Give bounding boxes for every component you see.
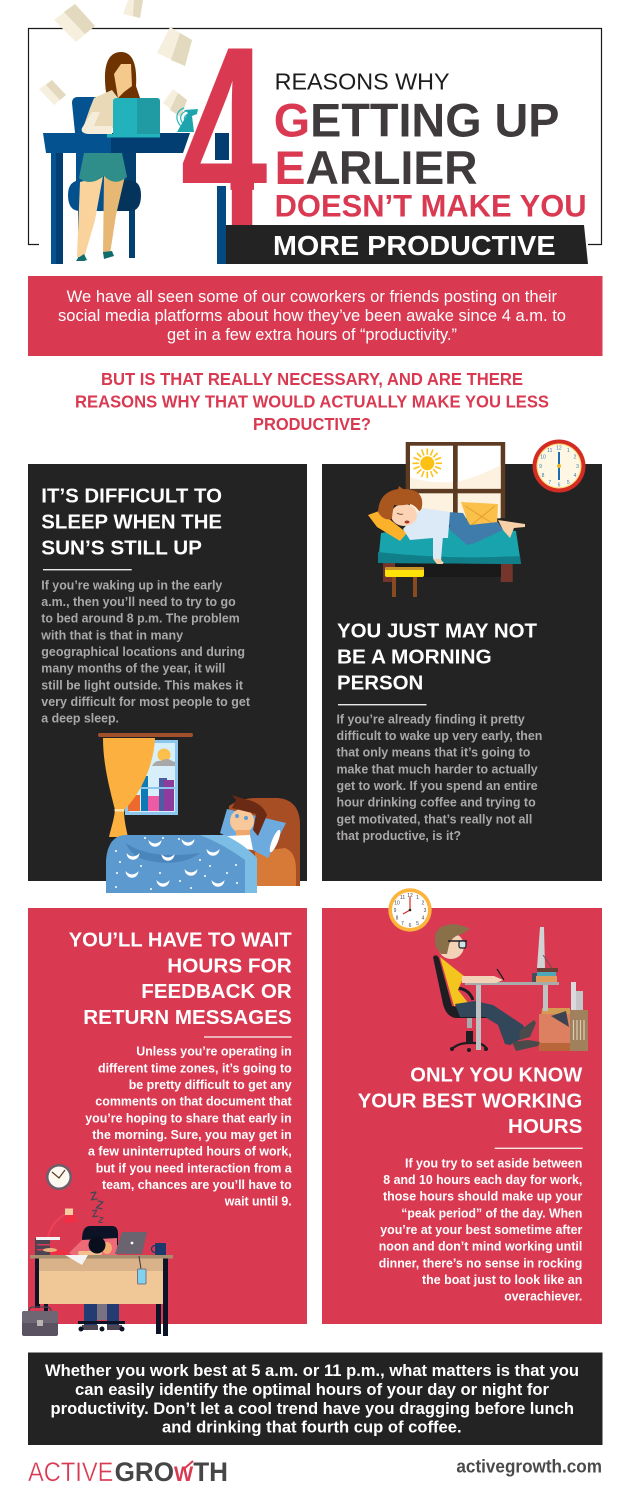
icon: wall clock: 11 <box>547 448 553 454</box>
reason 2 text: that productive, is it? <box>336 828 461 843</box>
reason 1 text: many months of the year, it will <box>41 661 225 676</box>
laptop <box>113 98 137 137</box>
snoring Z letters: Z <box>95 1197 105 1213</box>
reason 3 heading: FEEDBACK OR <box>141 980 292 1003</box>
icon: wall clock: 3 <box>576 464 579 470</box>
arm <box>462 976 503 983</box>
icon: wall clock: 3 <box>424 908 427 914</box>
question heading: PRODUCTIVE? <box>253 414 371 434</box>
reason 3 text: wait until 9. <box>224 1194 292 1209</box>
panel: conclusion: can easily identify the optimal hours of your day or night for <box>75 1381 550 1399</box>
reason 1 text: geographical locations and during <box>41 644 245 659</box>
icon: clock <box>46 1164 72 1190</box>
title: REASONS WHY <box>275 68 450 94</box>
reason 3 text: a few uninterrupted hours of work, <box>88 1144 292 1159</box>
reason 1 text: a.m., then you’ll need to try to go <box>41 594 236 609</box>
trousers and shoes <box>455 1001 540 1051</box>
reason 3 text: but if you need interaction from a <box>96 1160 293 1175</box>
header frame <box>28 28 602 244</box>
panel: conclusion: Whether you work best at 5 a.m. or 11 p.m., what matters is that you <box>45 1362 579 1380</box>
reason 1 heading: IT’S DIFFICULT TO <box>41 485 222 508</box>
reason 3 heading: HOURS FOR <box>167 954 292 977</box>
icon: wall clock: 6 <box>558 482 561 488</box>
reason 4 text: If you try to set aside between <box>405 1155 582 1170</box>
reason 2 text: If you’re already finding it pretty <box>336 711 526 726</box>
snoring Z letters: Z <box>98 1214 104 1225</box>
icon: wall clock <box>388 888 432 932</box>
chair back <box>82 1226 118 1245</box>
big number 4: 4 <box>180 0 268 281</box>
logo: GROWTH <box>115 1457 228 1487</box>
reason 3 text <box>85 1044 293 1209</box>
reason 2 heading: YOU JUST MAY NOT <box>337 620 537 643</box>
icon: wall clock: 4 <box>422 915 425 921</box>
blanket <box>106 835 257 893</box>
reason 3 text: the morning. Sure, you may get in <box>92 1127 292 1142</box>
reason 2 text: get to work. If you spend an entire <box>336 778 538 793</box>
reason 3 text: you’re hoping to share that early in <box>85 1110 292 1125</box>
icon: wall clock: 12 <box>407 893 413 899</box>
reason 2 heading: BE A MORNING <box>337 646 492 669</box>
reason 4 text: you’re at your best sometime after <box>380 1222 582 1237</box>
window <box>125 740 178 815</box>
headboard <box>229 798 300 886</box>
monitor and books <box>532 927 558 982</box>
phone charger <box>138 1256 146 1284</box>
title <box>274 68 587 224</box>
phone <box>177 108 190 131</box>
reason 1 heading <box>41 485 222 560</box>
reason 2 heading <box>337 620 537 695</box>
reason 3 text: Unless you’re operating in <box>136 1044 292 1059</box>
icon: wall clock: 5 <box>416 921 419 927</box>
panel: reason 1 background <box>28 464 307 881</box>
logo <box>28 1457 228 1487</box>
panel: conclusion: productivity. Don’t let a cool trend have you dragging before lunch <box>50 1400 574 1418</box>
reason 1 text: with that is that in many <box>40 627 184 642</box>
reason 3 text: different time zones, it’s going to <box>98 1060 292 1075</box>
bed <box>378 527 521 582</box>
illustration: sleeping boy in bed <box>368 442 525 597</box>
torso and arm <box>83 90 118 128</box>
panel: reason 4 background <box>322 908 602 1324</box>
pillows <box>368 511 407 541</box>
reason 4 heading <box>358 1064 583 1138</box>
trousers and chair base <box>78 1304 125 1332</box>
icon: flying papers <box>39 0 192 117</box>
pillow <box>220 809 286 858</box>
curtain <box>103 738 155 837</box>
icon: wall clock: 7 <box>548 480 551 486</box>
panel: intro: social media platforms about how they’ve been awake since 4 a.m. to <box>58 307 566 325</box>
panel: intro <box>28 276 602 356</box>
icon: wall clock: 5 <box>567 480 570 486</box>
illustration: man working at desk <box>388 888 588 1052</box>
laptop <box>115 1232 147 1254</box>
icon: wall clock: 4 <box>574 473 577 479</box>
title: DOESN’T MAKE YOU <box>275 188 587 224</box>
icon: wall clock: 8 <box>396 915 399 921</box>
icon: wall clock: 7 <box>401 921 404 927</box>
reason 4 text: dinner, there’s no sense in rocking <box>379 1255 582 1270</box>
reason 4 text: 8 and 10 hours each day for work, <box>383 1172 582 1187</box>
question heading: REASONS WHY THAT WOULD ACTUALLY MAKE YOU LESS <box>75 392 549 412</box>
legs <box>77 176 103 258</box>
reason 2 text: that only means that it’s going to <box>336 745 530 760</box>
snoring Z letters <box>89 1189 105 1225</box>
lamp <box>44 1208 78 1255</box>
panel: intro: We have all seen some of our coworkers or friends posting on their <box>67 288 558 306</box>
panel: conclusion: and drinking that fourth cup of coffee. <box>162 1419 462 1437</box>
illustration: woman at desk <box>43 52 229 264</box>
tray <box>35 1237 60 1255</box>
reason 3 text: be pretty difficult to get any <box>129 1077 293 1092</box>
reason 1 text: very difficult for most people to get <box>41 694 251 709</box>
question heading: BUT IS THAT REALLY NECESSARY, AND ARE THERE <box>101 369 523 389</box>
moons and stars <box>115 837 238 890</box>
icon: wall clock: 9 <box>539 464 542 470</box>
snoring Z letters: Z <box>91 1208 100 1220</box>
reason 2 heading: PERSON <box>337 672 423 695</box>
snoring Z letters: Z <box>89 1189 98 1203</box>
reason 1 heading: SLEEP WHEN THE <box>41 511 222 534</box>
briefcase <box>22 1307 58 1336</box>
sleeping person <box>69 1238 117 1255</box>
reason 2 text: get motivated, that’s really not all <box>336 811 532 826</box>
reason 1 text: a deep sleep. <box>41 711 119 726</box>
icon: sun <box>412 448 442 478</box>
reason 4 heading: YOUR BEST WORKING <box>358 1089 582 1112</box>
reason 4 text: “peak period” of the day. When <box>401 1205 582 1220</box>
icon: wall clock: 1 <box>567 448 570 454</box>
rod <box>98 733 193 737</box>
question heading <box>75 369 549 434</box>
heading: black banner <box>226 225 588 264</box>
title: GETTING UP <box>274 95 560 148</box>
icon: wall clock: 11 <box>400 895 405 901</box>
window <box>406 442 505 518</box>
panel: conclusion <box>28 1352 602 1445</box>
desk top <box>43 133 111 153</box>
stool <box>385 567 424 597</box>
reason 2 text: hour drinking coffee and trying to <box>336 795 536 810</box>
reason 1 text: still be light outside. This makes it <box>41 677 244 692</box>
website url: activegrowth.com <box>456 1457 602 1477</box>
reason 1 heading: SUN’S STILL UP <box>41 537 202 560</box>
icon: wall clock: 9 <box>394 908 397 914</box>
reason 4 text: overachiever. <box>504 1289 582 1304</box>
reason 3 text: comments on that document that <box>95 1094 292 1109</box>
panel: intro: get in a few extra hours of “productivity.” <box>167 326 457 344</box>
icon: wall clock: 2 <box>574 454 577 460</box>
icon: wall clock: 2 <box>422 900 425 906</box>
reason 3 heading <box>69 929 292 1029</box>
head <box>230 809 254 833</box>
panel: reason 2 background <box>322 464 602 881</box>
reason 2 text: difficult to wake up very early, then <box>336 728 542 743</box>
reason 1 text: to bed around 8 p.m. The problem <box>41 611 240 626</box>
storage box and bin <box>539 982 588 1051</box>
reason 3 heading: RETURN MESSAGES <box>83 1006 292 1029</box>
reason 1 text <box>40 577 251 726</box>
logo: ACTIVE <box>28 1457 113 1487</box>
boy <box>447 512 503 545</box>
reason 4 heading: HOURS <box>508 1115 582 1138</box>
reason 4 text: those hours should make up your <box>383 1189 582 1204</box>
reason 4 text: the boat just to look like an <box>422 1272 582 1287</box>
chair <box>433 955 494 1052</box>
reason 2 text <box>336 711 542 843</box>
icon: wall clock: 12 <box>556 445 562 451</box>
head <box>435 924 470 959</box>
heading: black banner: MORE PRODUCTIVE <box>273 230 556 261</box>
icon: wall clock: 1 <box>416 895 419 901</box>
front desk leg <box>476 985 481 1050</box>
illustration: man asleep at desk <box>22 1164 173 1336</box>
shirt <box>440 957 469 1006</box>
reason 3 text: team, chances are you’ll have to <box>102 1177 292 1192</box>
desk leg front <box>217 186 226 264</box>
reason 1 text: If you’re waking up in the early <box>41 577 223 592</box>
desk <box>30 1255 173 1336</box>
reason 2 text: make that much harder to actually <box>336 761 539 776</box>
icon: wall clock: 6 <box>409 923 412 929</box>
hair and face <box>105 52 140 98</box>
icon: wall clock <box>532 440 586 492</box>
panel: reason 3 background <box>28 908 307 1324</box>
reason 4 text <box>379 1155 582 1304</box>
chair <box>68 97 141 258</box>
skirt <box>79 153 127 182</box>
mug <box>152 1243 166 1255</box>
icon: wall clock: 10 <box>540 454 546 460</box>
desk <box>465 982 559 1011</box>
icon: wall clock: 10 <box>394 900 400 906</box>
title: EARLIER <box>275 142 478 195</box>
illustration: awake man in bed <box>98 733 300 893</box>
icon: wall clock: 8 <box>542 473 545 479</box>
big number 4 <box>170 0 272 281</box>
reason 3 heading: YOU’LL HAVE TO WAIT <box>69 929 292 952</box>
reason 4 text: noon and don’t mind working until <box>379 1239 582 1254</box>
reason 4 heading: ONLY YOU KNOW <box>410 1064 583 1087</box>
